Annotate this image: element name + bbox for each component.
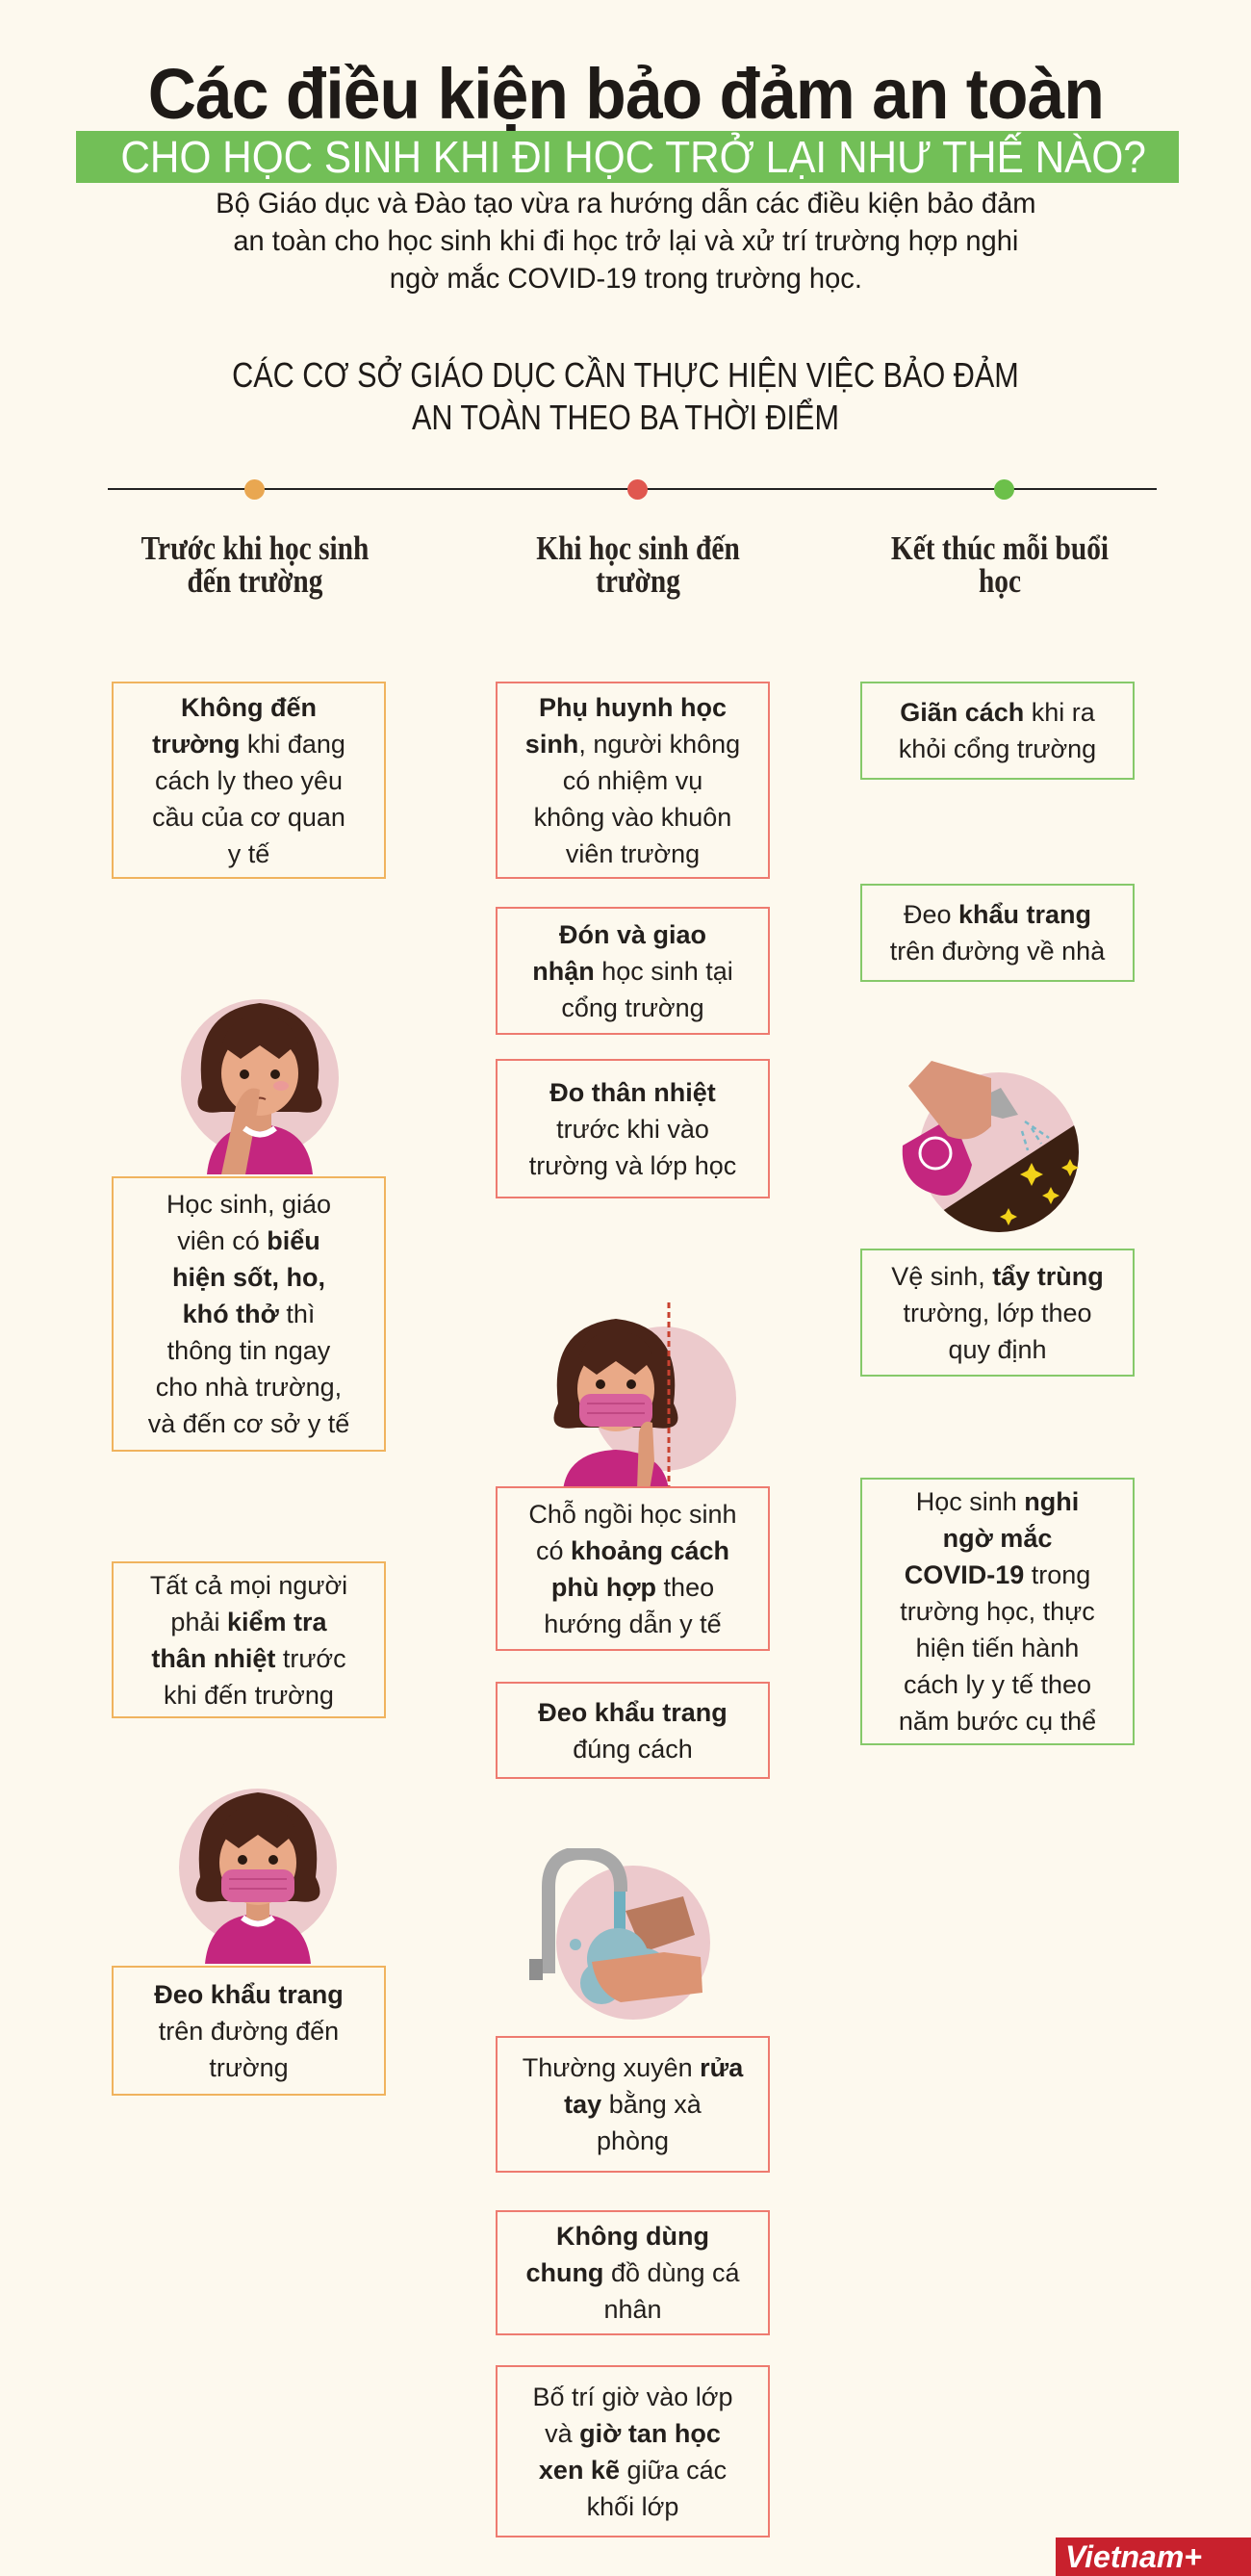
title: Các điều kiện bảo đảm an toàn [147,54,1104,134]
text: Tất cả mọi người [150,1571,347,1600]
text: COVID-19 trong [905,1560,1090,1589]
column 2 boxes: có nhiệm vụ [563,766,702,795]
text: chung đồ dùng cá [525,2258,740,2287]
text: Đo thân nhiệt [549,1078,716,1107]
text: ngờ mắc [943,1524,1052,1553]
text: và đến cơ sở y tế [148,1409,349,1438]
heading: column 1 [141,529,369,600]
text: Thường xuyên rửa [523,2053,743,2082]
heading: column 2: trường [596,562,680,600]
text: Đón và giao [559,920,706,949]
text: hướng dẫn y tế [544,1610,722,1638]
illustration: girl coughing [181,999,339,1174]
subtitle bar: CHO HỌC SINH KHI ĐI HỌC TRỞ LẠI NHƯ THẾ NÀO? [120,132,1146,182]
dot: red [627,479,648,500]
text: cách ly y tế theo [904,1670,1091,1699]
text: Học sinh, giáo [166,1190,331,1219]
logo: Vietnam+ [1065,2539,1202,2574]
text: khối lớp [587,2491,678,2520]
text: phòng [597,2126,669,2155]
text: nhân [603,2295,662,2324]
text: Không dùng [556,2222,709,2251]
text: Đeo khẩu trang [538,1698,728,1727]
intro text: an toàn cho học sinh khi đi học trở lại và xử trí trường hợp nghi [233,225,1018,257]
text: trên đường về nhà [890,937,1105,966]
text: và giờ tan học [545,2418,721,2447]
dot: orange [244,479,265,500]
text: Học sinh nghi [916,1487,1079,1516]
text: trường, lớp theo [903,1298,1092,1327]
text: Đeo khẩu trang [154,1979,344,2008]
text: khó thở thì [183,1300,315,1328]
section heading: CÁC CƠ SỞ GIÁO DỤC CẦN THỰC HIỆN VIỆC BẢO ĐẢM [232,355,1019,395]
intro text: ngờ mắc COVID-19 trong trường học. [389,263,862,295]
text: trường và lớp học [529,1151,736,1180]
text: hiện tiến hành [916,1634,1079,1662]
text: có khoảng cách [536,1536,729,1565]
text: cổng trường [561,993,704,1022]
text: thông tin ngay [167,1336,330,1365]
text: Vệ sinh, tẩy trùng [891,1261,1104,1290]
column 1 boxes: y tế [228,839,269,868]
text: Chỗ ngồi học sinh [528,1500,737,1529]
text: khi đến trường [164,1681,334,1710]
text: hiện sốt, ho, [172,1263,325,1292]
column 2 boxes [496,682,770,879]
column 3 boxes [860,682,1135,780]
column 2 boxes: sinh, người không [525,730,740,759]
heading: column 3: học [979,562,1021,600]
column 1 boxes: cách ly theo yêu [155,766,343,795]
heading: column 1: đến trường [188,562,322,600]
text: Đeo khẩu trang [904,900,1091,929]
intro text: Bộ Giáo dục và Đào tạo vừa ra hướng dẫn các điều kiện bảo đảm [216,188,1035,219]
text: trên đường đến [159,2016,339,2045]
heading: column 2: Khi học sinh đến [536,529,740,567]
section heading: AN TOÀN THEO BA THỜI ĐIỂM [412,398,839,437]
column 3 boxes: khỏi cổng trường [899,734,1096,763]
text: Bố trí giờ vào lớp [533,2382,733,2410]
column 1 boxes [112,682,386,879]
intro text [216,188,1035,295]
heading: column 2 [536,529,740,600]
column 1 boxes: trường khi đang [152,730,345,759]
column 1 boxes: Không đến [181,693,317,722]
column 2 boxes: Phụ huynh học [539,693,727,722]
text: xen kẽ giữa các [539,2455,727,2484]
text: cho nhà trường, [156,1373,342,1402]
text: viên có biểu [177,1226,320,1255]
logo [1056,2537,1251,2576]
text: phải kiểm tra [170,1608,327,1636]
text: thân nhiệt trước [151,1644,346,1673]
text: trường [209,2052,289,2081]
column 2 boxes: không vào khuôn [534,803,731,832]
column 1 boxes: cầu của cơ quan [152,803,345,832]
column 3 boxes: Giãn cách khi ra [900,698,1095,727]
dot: green [994,479,1014,500]
text: nhận học sinh tại [532,957,733,986]
illustration: girl with mask, distancing [554,1302,736,1486]
text: phù hợp theo [551,1573,714,1602]
text: quy định [948,1334,1047,1363]
illustration: girl with mask [179,1789,337,1964]
text: năm bước cụ thể [899,1707,1096,1736]
text: tay bằng xà [564,2090,702,2119]
text: đúng cách [573,1735,693,1764]
heading: column 3 [891,529,1109,600]
heading: column 3: Kết thúc mỗi buổi [891,529,1109,567]
section heading [232,355,1019,437]
illustration: hand washing [529,1848,710,2020]
timeline [108,479,1157,500]
illustration: disinfectant spray [903,1061,1079,1232]
text: trường học, thực [900,1597,1095,1626]
heading: column 1: Trước khi học sinh [141,529,369,567]
text: trước khi vào [556,1115,709,1144]
column 2 boxes: viên trường [566,839,700,868]
